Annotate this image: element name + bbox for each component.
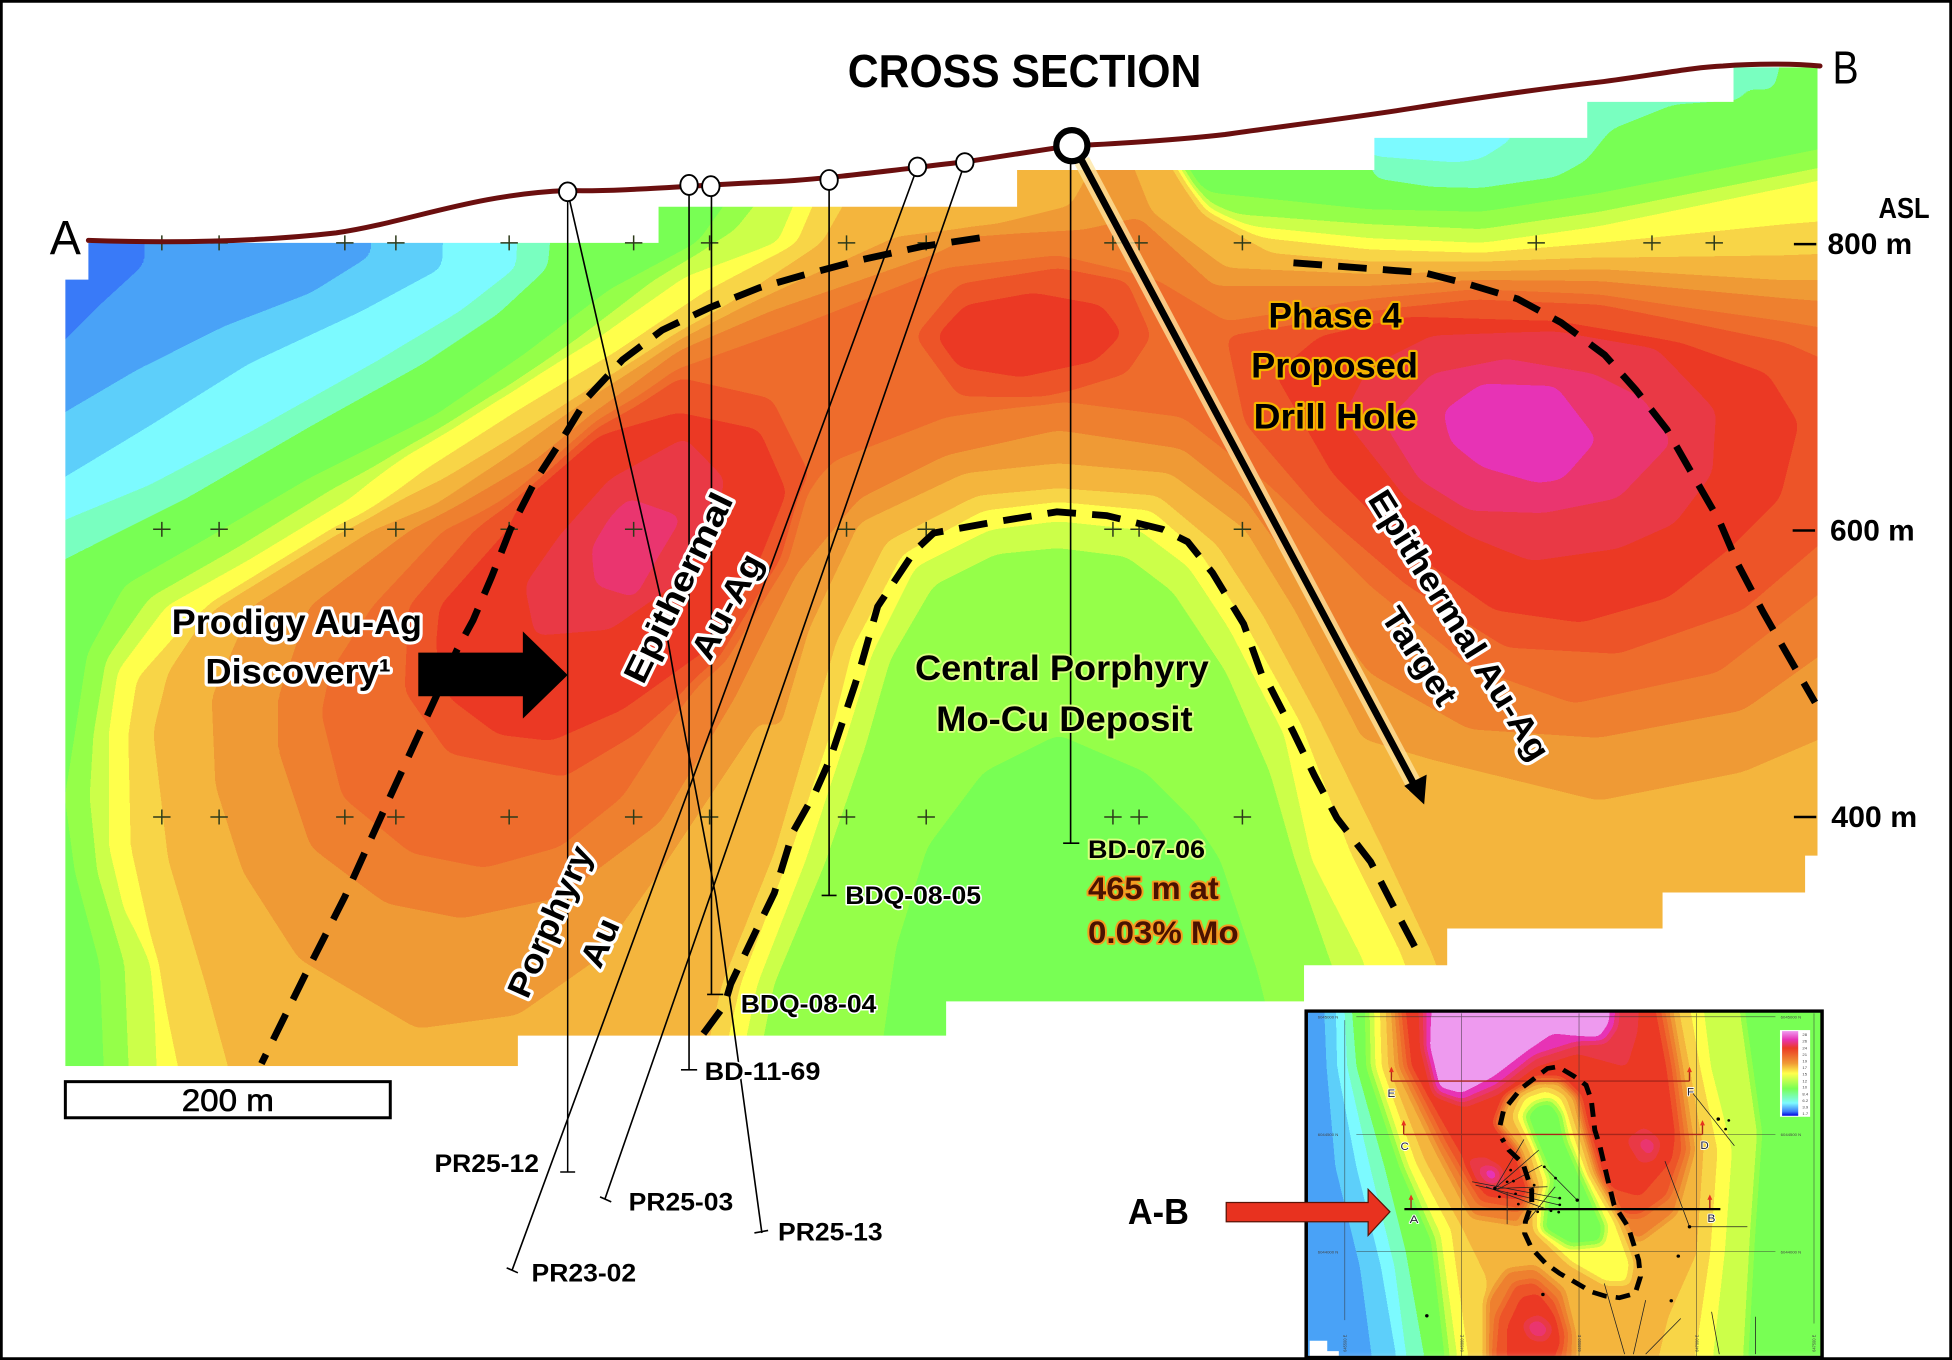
drill hole labels bbox=[434, 836, 1205, 1288]
inset grid labels: 6044500 N bbox=[1318, 1132, 1338, 1137]
drill result callout: 0.03% Mo bbox=[1088, 915, 1239, 950]
proposed collar bbox=[1056, 130, 1087, 161]
inset section letters: A bbox=[1410, 1213, 1419, 1226]
inset section letters: B bbox=[1707, 1212, 1716, 1225]
inset legend: 28 bbox=[1802, 1032, 1808, 1037]
callout: Prodigy discovery bbox=[172, 603, 422, 692]
proposed drill hole arrow bbox=[1082, 161, 1427, 805]
drill collars bbox=[559, 153, 974, 201]
red locator arrow bbox=[1226, 1189, 1390, 1235]
inset locator label A-B: A-B bbox=[1128, 1191, 1189, 1232]
black arrow to discovery bbox=[418, 631, 568, 719]
drill hole BDQ-08-05 bbox=[822, 181, 837, 895]
dashed boundary: central porphyry dome bbox=[703, 512, 1418, 1034]
inset grid labels: 645500 E bbox=[1342, 1334, 1348, 1352]
inset grid labels bbox=[1318, 1015, 1817, 1352]
dashed boundary: right epithermal target bbox=[1293, 263, 1815, 702]
drill hole labels: PR25-03 bbox=[629, 1189, 733, 1217]
inset section letters: C bbox=[1401, 1140, 1409, 1153]
inset section letters: F bbox=[1687, 1086, 1694, 1099]
inset drill traces bbox=[1472, 1093, 1755, 1354]
collar plus-mark grid bbox=[153, 235, 1723, 824]
inset legend: 15 bbox=[1802, 1072, 1808, 1077]
drill hole PR25-13 bbox=[568, 192, 768, 1233]
label: phase 4 proposed drill hole: Proposed bbox=[1251, 346, 1418, 385]
inset section letters: D bbox=[1700, 1139, 1709, 1152]
drill hole labels: PR25-12 bbox=[434, 1150, 539, 1178]
inset grid labels: 6044000 N bbox=[1781, 1250, 1801, 1254]
drill holes with end caps bbox=[507, 146, 1079, 1273]
inset heat field bbox=[1308, 1012, 1820, 1356]
drill result callout bbox=[1088, 871, 1239, 950]
inset grid labels: 646000 E bbox=[1459, 1334, 1464, 1352]
inset grid labels: 6044500 N bbox=[1781, 1132, 1801, 1137]
elevation axis: 800 m bbox=[1828, 228, 1912, 261]
inset grid labels: 646500 E bbox=[1577, 1334, 1582, 1352]
dashed boundary: epithermal zone, left arc bbox=[261, 238, 980, 1064]
label: central porphyry deposit: Mo-Cu Deposit bbox=[936, 700, 1193, 739]
topography surface line bbox=[88, 64, 1820, 242]
label: central porphyry deposit: Central Porphyry bbox=[915, 649, 1209, 688]
drill hole labels: PR23-02 bbox=[532, 1260, 636, 1288]
drill hole BDQ-08-04 bbox=[707, 187, 723, 994]
section end label B: B bbox=[1832, 41, 1859, 93]
inset legend: 24 bbox=[1802, 1046, 1808, 1050]
rotated label: Porphyry Au: Au bbox=[574, 913, 628, 973]
drill hole PR25-12 bbox=[560, 192, 575, 1172]
drill result callout: 465 m at bbox=[1088, 871, 1219, 906]
drill hole BD-07-06 bbox=[1063, 146, 1079, 843]
drill hole labels: BD-07-06 bbox=[1088, 836, 1205, 864]
elevation axis: 600 m bbox=[1830, 515, 1915, 548]
inset legend: 21 bbox=[1802, 1052, 1808, 1057]
callout: Prodigy discovery: Discovery¹ bbox=[205, 653, 391, 692]
label: central porphyry deposit bbox=[915, 649, 1209, 739]
inset legend bbox=[1780, 1030, 1810, 1117]
inset frame bbox=[1306, 1011, 1822, 1357]
rotated label: Epithermal Au-Ag Target: Target bbox=[1373, 601, 1464, 713]
inset legend: 8.4 bbox=[1802, 1092, 1809, 1096]
inset legend: 19 bbox=[1802, 1059, 1808, 1064]
drill hole BD-11-69 bbox=[681, 186, 697, 1070]
elevation axis bbox=[1793, 193, 1930, 834]
scale bar: 200 m bbox=[182, 1083, 274, 1118]
inset grid labels: 647500 E bbox=[1812, 1334, 1817, 1352]
drill hole PR23-02 bbox=[507, 167, 917, 1273]
rotated label: Epithermal Au-Ag left: Epithermal bbox=[617, 487, 741, 689]
rotated label: Porphyry Au bbox=[501, 840, 628, 1003]
drill hole labels: BD-11-69 bbox=[705, 1058, 820, 1086]
inset plan map bbox=[1304, 1009, 1824, 1358]
callout: Prodigy discovery: Prodigy Au-Ag bbox=[172, 603, 422, 642]
rotated label: Epithermal Au-Ag left: Au-Ag bbox=[684, 548, 771, 666]
heat map: cross-section contour field bbox=[65, 67, 1818, 1066]
drill hole PR25-03 bbox=[600, 163, 965, 1202]
inset legend: 1.7 bbox=[1802, 1111, 1809, 1116]
rotated label: Epithermal Au-Ag left bbox=[617, 487, 771, 689]
elevation axis: 400 m bbox=[1831, 801, 1917, 834]
rotated label: Epithermal Au-Ag Target: Epithermal Au-Ag bbox=[1360, 484, 1557, 767]
label: phase 4 proposed drill hole: Phase 4 bbox=[1269, 297, 1402, 336]
inset grid labels: 6044000 N bbox=[1318, 1250, 1338, 1254]
label: phase 4 proposed drill hole: Drill Hole bbox=[1254, 397, 1417, 436]
inset section lines bbox=[1389, 1067, 1720, 1209]
inset section letters: E bbox=[1388, 1087, 1396, 1100]
inset grid labels: 6045000 N bbox=[1318, 1015, 1338, 1020]
inset grid labels: 647000 E bbox=[1694, 1334, 1699, 1352]
inset grid labels: 6045000 N bbox=[1781, 1015, 1801, 1020]
inset legend: 6.2 bbox=[1802, 1098, 1809, 1103]
inset legend: 12 bbox=[1802, 1079, 1808, 1083]
drill hole labels: BDQ-08-04 bbox=[741, 991, 877, 1019]
inset legend: 3.9 bbox=[1802, 1105, 1809, 1109]
scale bar bbox=[65, 1082, 390, 1118]
title: CROSS SECTION bbox=[848, 45, 1201, 97]
drill hole labels: PR25-13 bbox=[778, 1218, 883, 1246]
inset coordinate grid bbox=[1345, 1013, 1814, 1357]
drill hole labels: BDQ-08-05 bbox=[845, 882, 981, 910]
inset dashed deposit outline bbox=[1500, 1067, 1640, 1298]
section end label A: A bbox=[50, 211, 82, 265]
inset section letters bbox=[1388, 1086, 1716, 1226]
inset legend: 17 bbox=[1802, 1065, 1808, 1070]
inset collar dots bbox=[1425, 1117, 1730, 1317]
inset legend: 10 bbox=[1802, 1085, 1808, 1090]
elevation axis: ASL bbox=[1879, 193, 1930, 225]
inset legend: 26 bbox=[1802, 1039, 1808, 1044]
inset white corner bbox=[1310, 1341, 1339, 1357]
rotated label: Porphyry Au: Porphyry bbox=[501, 840, 601, 1003]
label: phase 4 proposed drill hole bbox=[1251, 297, 1418, 436]
